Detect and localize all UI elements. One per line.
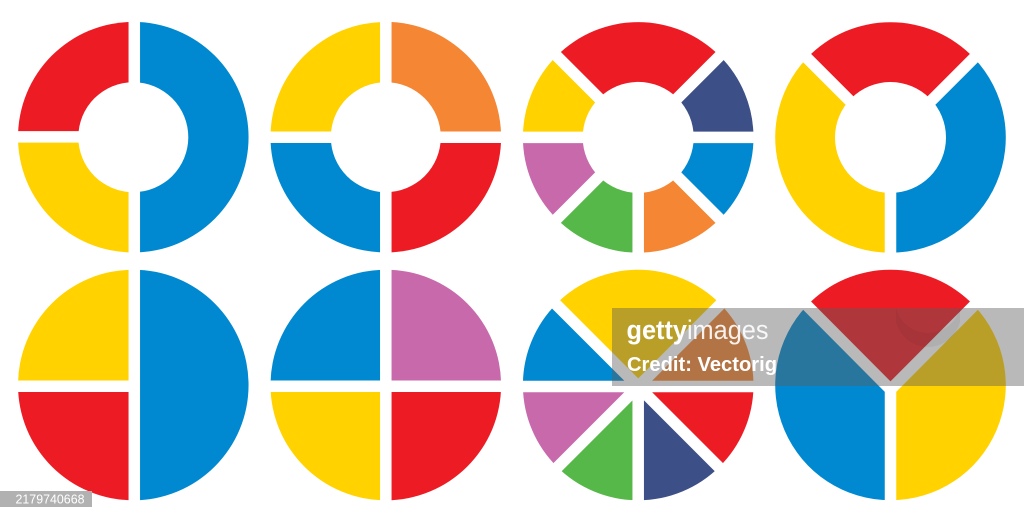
donut chart: top row 2, four segments bbox=[266, 17, 506, 257]
pie chart: bottom row 1, three segments bbox=[13, 265, 249, 505]
segment: blue right half bbox=[133, 270, 249, 500]
segment: navy right-top bbox=[638, 56, 754, 137]
segment: blue left-top bbox=[523, 304, 638, 386]
segment: red top bbox=[557, 22, 720, 137]
segment: red bottom-left bbox=[18, 385, 134, 500]
segment: red top bbox=[807, 270, 974, 390]
segment: blue left bbox=[775, 306, 890, 500]
segment: yellow top-left bbox=[18, 270, 134, 386]
segment: blue right bbox=[890, 58, 1006, 253]
pie chart: bottom row 3, seven segments bbox=[518, 270, 758, 505]
image id number: 2179740668 bbox=[16, 492, 84, 506]
segment: yellow bottom-left bbox=[18, 137, 134, 252]
segment: navy bottom-right bbox=[638, 386, 720, 500]
segment: pink top-right bbox=[386, 270, 501, 385]
segment: orange right-top bbox=[638, 304, 754, 386]
segment: orange bottom-right bbox=[638, 137, 720, 253]
donut chart: top row 4, three segments bbox=[775, 22, 1006, 258]
segment: yellow left bbox=[775, 58, 890, 253]
image id tag bbox=[0, 491, 92, 507]
donut chart: top row 3, seven segments bbox=[518, 22, 758, 257]
watermark credit text: Credit: Vectorig bbox=[627, 354, 777, 376]
segment: red bottom-right bbox=[386, 385, 501, 500]
pie chart: bottom row 4, three segments bbox=[775, 270, 1006, 505]
segment: orange top-right bbox=[386, 22, 501, 137]
segment: red bottom-right bbox=[386, 137, 501, 252]
watermark banner bbox=[612, 308, 1024, 386]
segment: pink left-bottom bbox=[523, 386, 638, 466]
segment: red top-left bbox=[18, 22, 134, 137]
segment: yellow bottom-left bbox=[270, 385, 386, 500]
donut chart: top row 1, three segments bbox=[13, 17, 249, 257]
segment: blue right-bottom bbox=[638, 137, 754, 219]
pie chart: bottom row 2, four segments bbox=[266, 265, 506, 505]
segment: blue top-left bbox=[270, 270, 386, 385]
segment: red right-bottom bbox=[638, 386, 754, 466]
segment: green bottom-left bbox=[557, 386, 638, 500]
segment: yellow top-left bbox=[270, 22, 386, 137]
segment: blue bottom-left bbox=[270, 137, 386, 252]
watermark logo text: gettyimages bbox=[626, 315, 768, 345]
segment: yellow right bbox=[890, 306, 1006, 500]
segment: green bottom-left bbox=[557, 137, 638, 253]
segment: pink left-bottom bbox=[523, 137, 638, 219]
segment: yellow top bbox=[557, 270, 720, 386]
segment: blue right half bbox=[133, 22, 249, 252]
segment: yellow left-top bbox=[523, 56, 638, 137]
segment: red top bbox=[807, 22, 974, 142]
